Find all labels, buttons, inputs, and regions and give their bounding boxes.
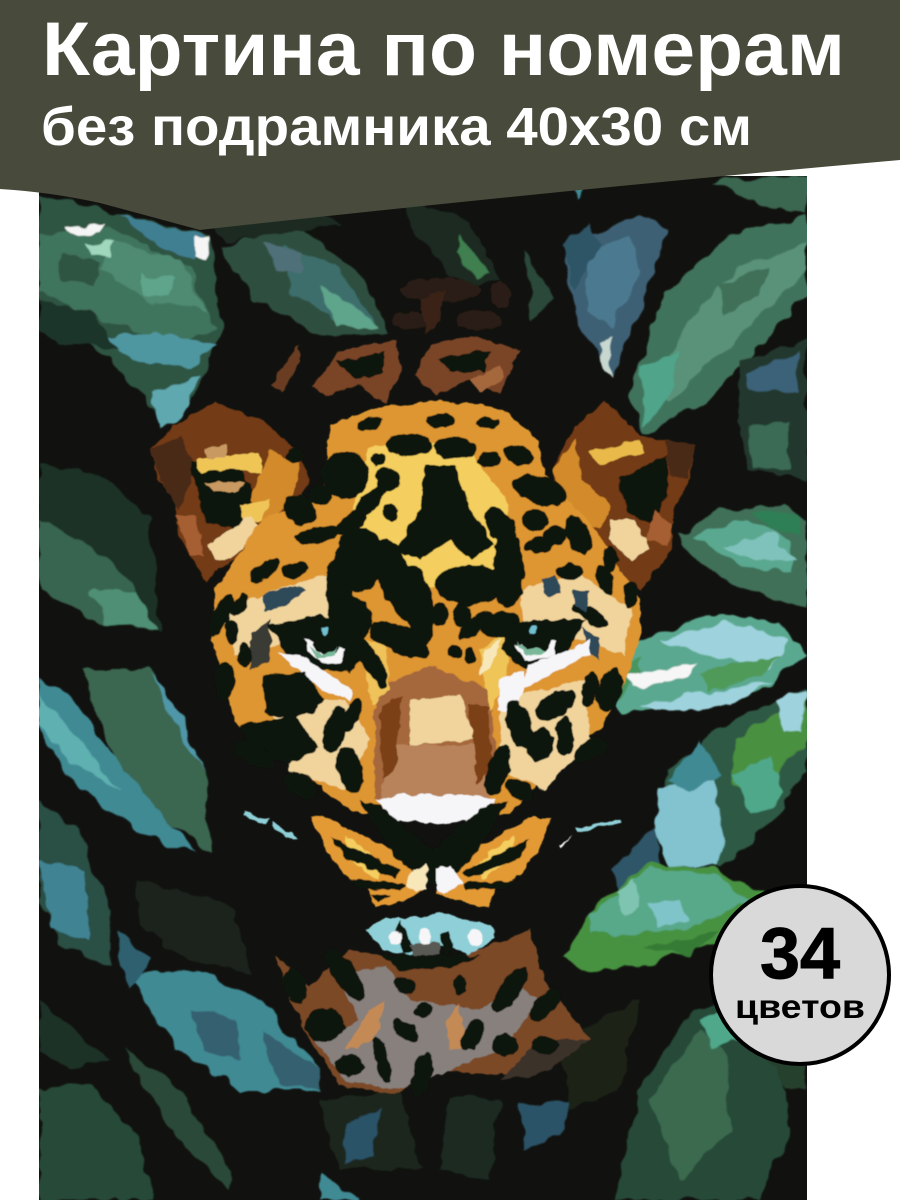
cheek black markings [215,628,627,805]
leaf: top left [39,195,222,428]
neck fur [275,930,590,1095]
leaf: bottom left dark green [40,1000,360,1200]
leaf: slate blue top right [562,216,668,378]
foliage leaves [39,176,808,1200]
leaf: bright pale blue [598,614,808,713]
cheek cream patches [222,570,632,790]
leaf: teal and green right lower [612,688,807,895]
leaf: right dark group [738,340,807,480]
right eye [500,620,585,672]
leaf: bottom right [615,1000,807,1200]
head base [212,400,640,815]
teal mouth [366,912,495,958]
black spots and forehead rosettes [205,413,637,668]
black nose lines [330,800,530,903]
brown marks above the head [270,278,520,405]
leaf: green lower right [562,864,772,970]
left eye [268,615,365,672]
header banner [0,0,900,230]
leaf: left middle dark green [39,465,160,632]
leaves: bottom centre shadows [320,1000,640,1180]
slate blue marks above the eyes [250,575,600,670]
muzzle white [376,795,496,824]
nose bridge [358,630,510,800]
orange whisker pads [310,817,552,908]
painting: jaguar among leaves [39,176,808,1200]
jaguar [150,278,695,1101]
leaf: left teal and green [39,668,210,852]
badge label: цветов [735,988,865,1025]
forehead yellow [350,440,510,595]
leaf: top centre [205,195,555,335]
white chin tufts [404,866,462,894]
whiskers [243,810,622,848]
leaf: far left lower [39,800,110,965]
subtitle: без подрамника 40х30 см [41,97,752,157]
leaf: teal bottom left [118,880,320,1090]
badge: 34 colours [711,886,889,1064]
leaf: large right [570,176,807,432]
badge number: 34 [760,914,840,994]
neck spots [282,952,561,1094]
right ear [552,400,695,590]
white cheek stripes [278,640,590,715]
title: Картина по номерам [42,7,845,92]
leaf: right middle green [678,504,807,607]
left ear [150,402,310,582]
